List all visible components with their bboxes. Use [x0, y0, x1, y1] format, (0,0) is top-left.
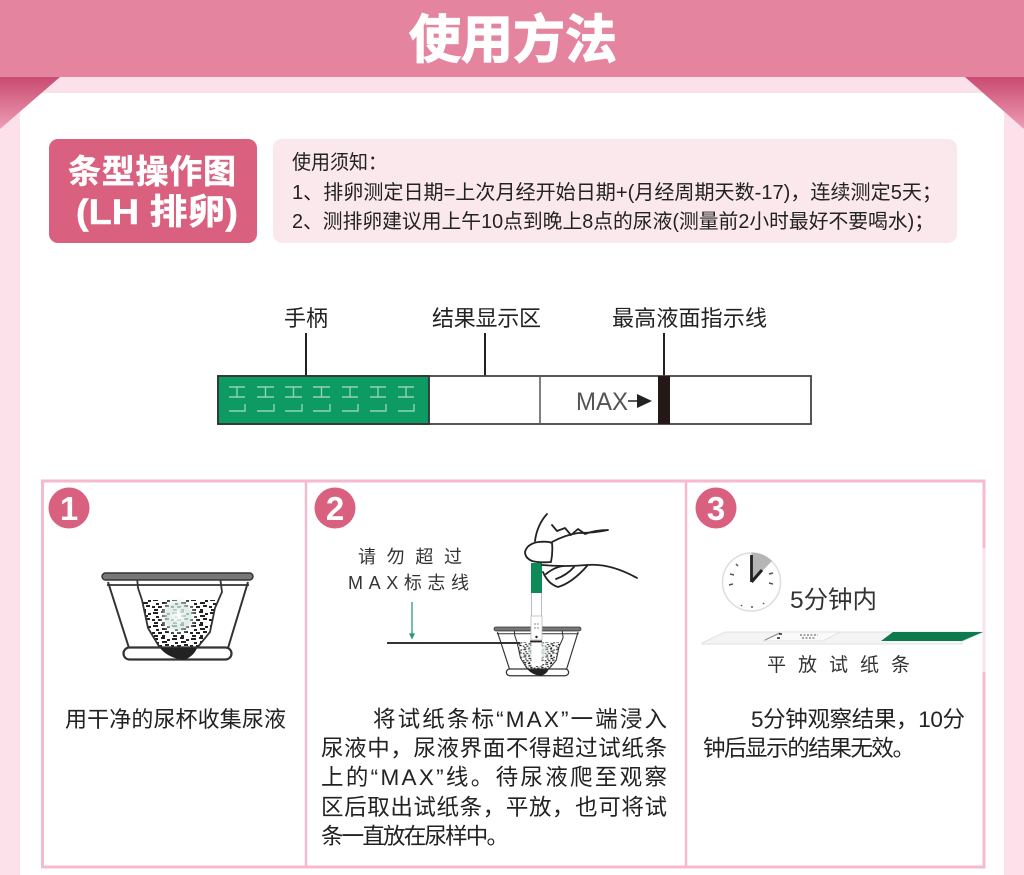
step 3 text: 5分钟观察结果，10分 — [751, 707, 965, 732]
arrow: down to max level — [410, 602, 414, 638]
step 2 text: 上的“MAX”线。待尿液爬至观察 — [321, 765, 667, 790]
label: max line: 最高液面指示线 — [612, 306, 767, 331]
step number 3 — [696, 488, 736, 528]
ribbon fold left — [0, 77, 60, 129]
test strip diagram — [218, 306, 811, 424]
notice box: 使用须知： — [292, 151, 387, 174]
panel: step 1 — [48, 488, 286, 732]
step number 2 — [314, 488, 356, 528]
notice box — [273, 139, 957, 243]
label: within 5 minutes: 5分钟内 — [790, 586, 877, 614]
illustration: strip laid flat — [702, 632, 983, 644]
step number 2: 2 — [326, 490, 344, 527]
step 3 text: 钟后显示的结果无效。 — [703, 736, 915, 761]
header banner — [0, 0, 1024, 77]
step 1 text: 用干净的尿杯收集尿液 — [65, 707, 286, 732]
step number 1: 1 — [60, 490, 78, 527]
warning label: MAX标志线 — [348, 573, 469, 593]
step 2 text: 条一直放在尿样中。 — [321, 824, 509, 849]
warning label: 请勿超过 — [358, 547, 462, 567]
steps table frame — [42, 481, 984, 867]
strip body: MAX — [576, 388, 628, 416]
label: lay strip flat: 平放试纸条 — [767, 654, 910, 676]
heading badge: strip operation diagram: 条型操作图 — [68, 153, 236, 190]
step 2 text: 尿液中，尿液界面不得超过试纸条 — [321, 736, 667, 761]
step number 3: 3 — [707, 490, 725, 527]
heading badge: strip operation diagram: (LH 排卵) — [76, 193, 238, 232]
label: result area: 结果显示区 — [432, 306, 541, 331]
warning label — [348, 547, 469, 593]
panel: step 3 — [696, 488, 983, 761]
label: handle — [284, 306, 328, 376]
panel: step 2 — [314, 488, 667, 849]
icon: hand holding strip — [525, 514, 637, 587]
title: 使用方法 — [409, 12, 617, 70]
label: handle: 手柄 — [284, 306, 328, 331]
icon: collection cup — [102, 573, 253, 660]
step 2 text — [321, 707, 667, 849]
strip body — [218, 376, 811, 424]
step 2 text: 区后取出试纸条，平放，也可将试 — [321, 795, 667, 820]
step 3 text — [703, 707, 965, 761]
heading badge: strip operation diagram — [49, 139, 257, 243]
step number 1 — [48, 488, 90, 528]
cup with dipped strip — [387, 563, 581, 676]
notice box: 2、测排卵建议用上午10点到晚上8点的尿液(测量前2小时最好不要喝水)； — [292, 210, 934, 233]
step 2 text: 将试纸条标“MAX”一端浸入 — [373, 707, 667, 732]
label: result area — [432, 306, 541, 376]
icon: clock — [722, 552, 780, 611]
notice box: 1、排卵测定日期=上次月经开始日期+(月经周期天数-17)，连续测定5天； — [292, 181, 942, 204]
ribbon fold right — [965, 77, 1024, 129]
